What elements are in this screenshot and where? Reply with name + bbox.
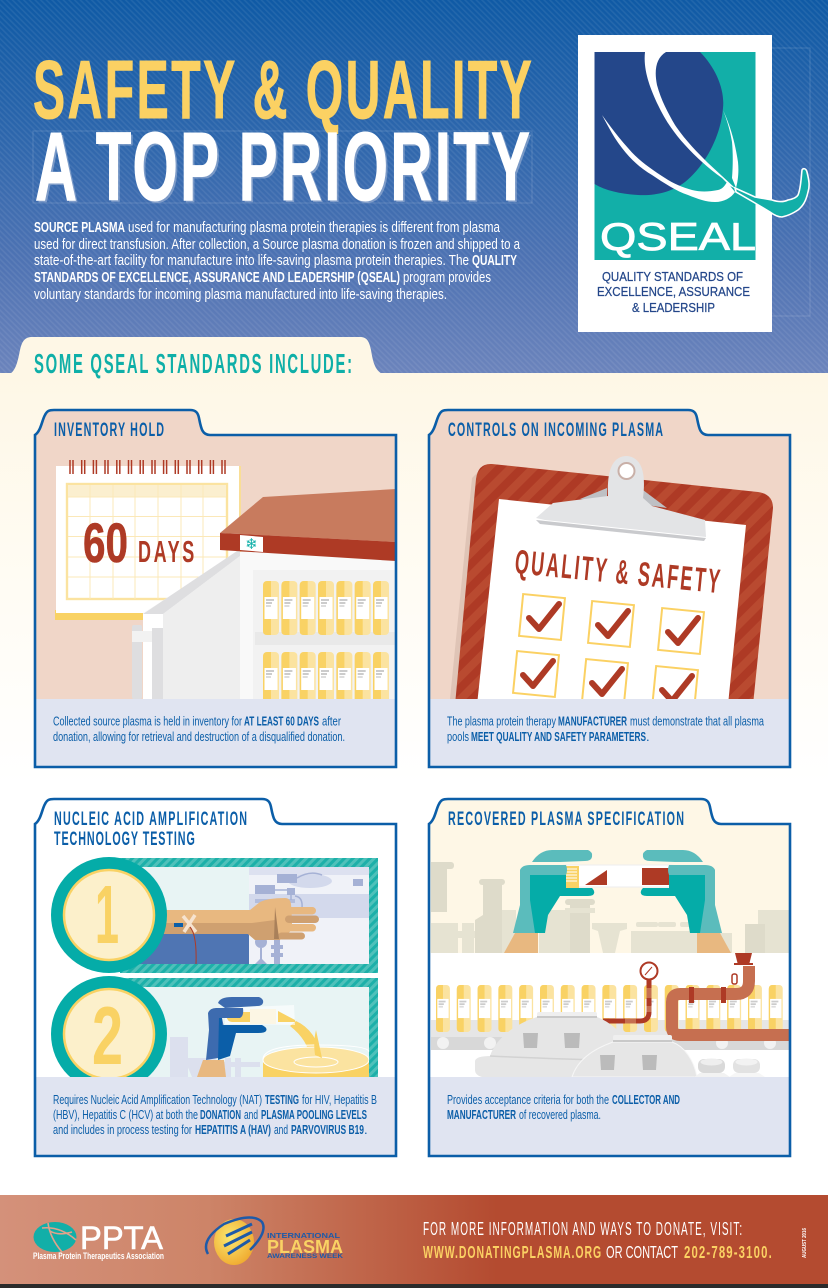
step 2 strip [51, 976, 378, 1077]
intro paragraph: SOURCE PLASMA [34, 220, 125, 236]
logo caption [597, 269, 750, 315]
left gloved hand [504, 850, 594, 953]
International Plasma Awareness Week logo [206, 1217, 343, 1265]
title [33, 45, 532, 223]
panel heading: TECHNOLOGY TESTING [54, 829, 195, 850]
right gloved hand [641, 850, 731, 953]
caption: of recovered plasma. [519, 1107, 601, 1122]
illustration: calendar and freezer [55, 460, 396, 706]
caption: . [364, 1122, 368, 1137]
PPTA logo [33, 1220, 164, 1262]
call to action: WWW.DONATINGPLASMA.ORG [423, 1243, 601, 1263]
caption: PARVOVIRUS B19 [291, 1122, 364, 1137]
intro paragraph [34, 220, 521, 303]
freezer [132, 489, 396, 706]
vial [557, 865, 679, 888]
panel: inventory hold [35, 410, 396, 767]
caption: TESTING [265, 1092, 299, 1107]
intro paragraph: STANDARDS OF EXCELLENCE, ASSURANCE AND LEADERSHIP (QSEAL) [34, 270, 400, 286]
caption: Requires Nucleic Acid Amplification Technology (NAT) [53, 1092, 262, 1107]
logo caption: EXCELLENCE, ASSURANCE [597, 284, 750, 299]
section tab [8, 337, 385, 379]
PPTA logo: PPTA [80, 1220, 164, 1256]
intro paragraph: state-of-the-art facility for manufacture into life-saving plasma protein therapies. The [34, 253, 469, 269]
QSEAL wordmark: QSEAL [600, 216, 756, 259]
freezer label with snowflake: ❄ [245, 535, 258, 553]
step 1 strip [51, 857, 378, 973]
caption: must demonstrate that all plasma [630, 714, 765, 728]
caption: . [646, 729, 650, 744]
gauge [640, 962, 658, 980]
header background [0, 0, 828, 376]
International Plasma Awareness Week logo: INTERNATIONAL [267, 1233, 341, 1240]
number badge 1 [51, 857, 167, 973]
logo caption: QUALITY STANDARDS OF [602, 269, 743, 284]
caption: AT LEAST 60 DAYS [244, 714, 319, 728]
intro paragraph: QUALITY [472, 253, 517, 269]
logo caption: & LEADERSHIP [632, 300, 715, 315]
checklist title: QUALITY & SAFETY [513, 542, 722, 601]
lab equipment [255, 873, 363, 964]
number badge 2: 2 [92, 989, 123, 1082]
caption: after [322, 714, 341, 728]
panel heading: CONTROLS ON INCOMING PLASMA [448, 420, 663, 441]
intro paragraph: used for direct transfusion. After collection, a Source plasma donation is frozen and shipped to a [34, 237, 521, 253]
intro paragraph: program provides [403, 270, 491, 286]
caption: Collected source plasma is held in inventory for [53, 714, 242, 728]
panel heading [54, 809, 247, 850]
plasma bottles [436, 985, 783, 1032]
intro paragraph: voluntary standards for incoming plasma manufactured into life-saving therapies. [34, 287, 447, 303]
caption: and [244, 1107, 258, 1122]
gloved hand [197, 997, 266, 1077]
footer [0, 1195, 828, 1288]
centrifuge domes [475, 1012, 765, 1077]
vial [225, 1005, 295, 1025]
caption: for HIV, Hepatitis B [302, 1092, 377, 1107]
date stamp: AUGUST 2016 [802, 1228, 808, 1258]
number badge 1: 1 [95, 868, 119, 961]
sleeve [140, 934, 249, 964]
calendar: DAYS [138, 535, 194, 569]
panel heading: RECOVERED PLASMA SPECIFICATION [448, 809, 684, 830]
clip [536, 456, 706, 541]
International Plasma Awareness Week logo: PLASMA [267, 1237, 343, 1257]
check marks [523, 604, 698, 701]
caption: and includes in process testing for [53, 1122, 192, 1137]
logo mark [594, 52, 809, 260]
caption [429, 699, 790, 767]
tape and tube [174, 915, 196, 964]
number badge 2 [51, 976, 167, 1077]
section heading: SOME QSEAL STANDARDS INCLUDE: [34, 348, 352, 379]
caption: (HBV), Hepatitis C (HCV) at both the [53, 1107, 198, 1122]
caption: MEET QUALITY AND SAFETY PARAMETERS [471, 729, 646, 744]
call to action: 202-789-3100. [684, 1244, 772, 1263]
caption [35, 1077, 396, 1156]
factory silhouette [431, 862, 789, 953]
cream content background [0, 373, 828, 1195]
caption: MANUFACTURER [558, 714, 627, 728]
caption: PLASMA POOLING LEVELS [261, 1107, 367, 1122]
60 days text: 60 [83, 511, 128, 574]
conveyor [431, 1020, 791, 1050]
checkboxes [513, 594, 704, 712]
call to action: FOR MORE INFORMATION AND WAYS TO DONATE, VISIT: [423, 1220, 742, 1240]
bowl [263, 1030, 369, 1077]
plasma bottles [263, 581, 389, 706]
panel: controls on incoming plasma [429, 410, 790, 767]
panel: recovered plasma specification [429, 799, 791, 1156]
title: A TOP PRIORITY [37, 115, 532, 223]
arm [160, 898, 319, 940]
lower white band [429, 953, 790, 1077]
caption: Provides acceptance criteria for both the [447, 1092, 609, 1107]
panel heading: NUCLEIC ACID AMPLIFICATION [54, 809, 247, 830]
logo tail [735, 169, 809, 217]
illustration: clipboard [450, 456, 773, 712]
call to action: OR CONTACT [606, 1242, 678, 1262]
International Plasma Awareness Week logo: AWARENESS WEEK [267, 1253, 343, 1260]
caption: donation, allowing for retrieval and destruction of a disqualified donation. [53, 729, 345, 744]
caption [429, 1077, 790, 1156]
calendar [55, 460, 241, 620]
caption: HEPATITIS A (HAV) [195, 1122, 271, 1137]
intro paragraph: used for manufacturing plasma protein therapies is different from plasma [128, 220, 501, 236]
pipework [603, 953, 791, 1035]
PPTA logo: Plasma Protein Therapeutics Association [33, 1251, 164, 1262]
freezer label with snowflake [240, 535, 263, 553]
QSEAL logo card [578, 35, 810, 332]
panel: nucleic acid amplification technology testing [35, 799, 396, 1156]
caption: pools [447, 729, 469, 744]
call to action [423, 1220, 772, 1263]
caption: COLLECTOR AND [612, 1092, 680, 1107]
caption: The plasma protein therapy [447, 714, 556, 728]
caption: DONATION [200, 1107, 241, 1122]
title line 1: SAFETY & QUALITY [33, 45, 532, 136]
caption [35, 699, 396, 767]
pouring liquid [290, 1021, 315, 1047]
caption: MANUFACTURER [447, 1107, 516, 1122]
title line 2: A TOP PRIORITY [35, 113, 530, 221]
caption: and [274, 1122, 288, 1137]
panel heading: INVENTORY HOLD [54, 420, 164, 441]
